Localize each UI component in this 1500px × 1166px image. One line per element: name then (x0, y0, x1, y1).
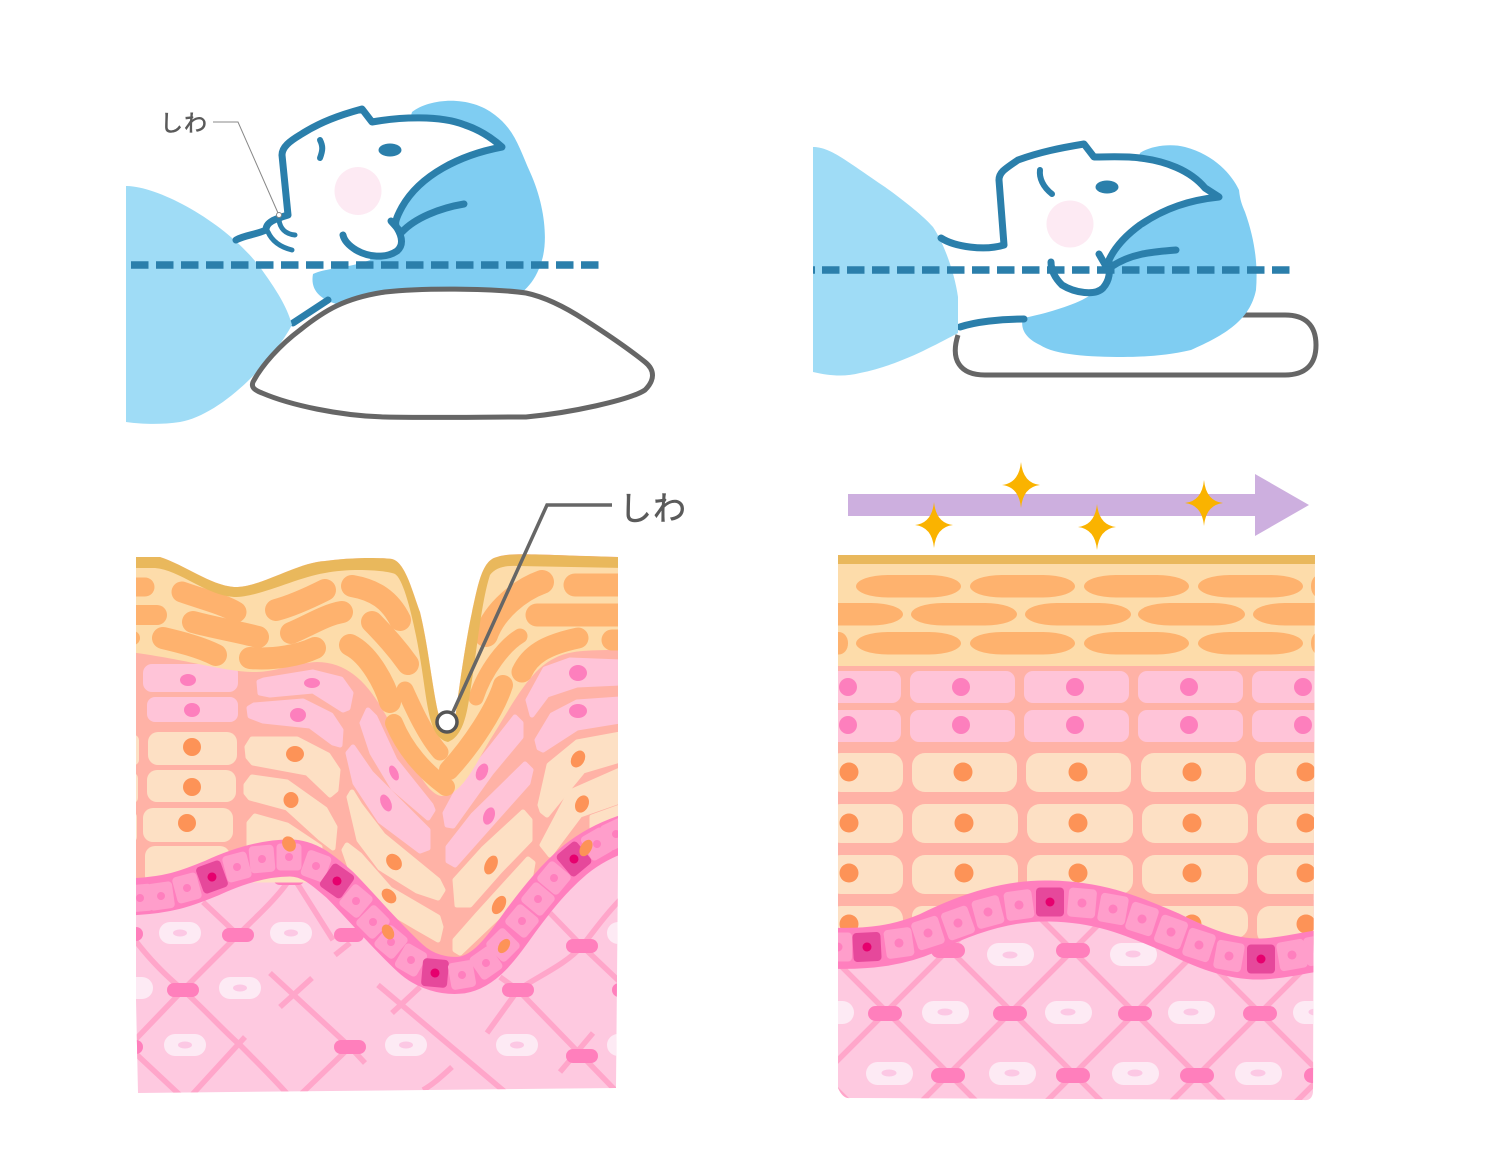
callout: wrinkle small: しわ (160, 110, 208, 136)
panel: wrinkled skin cross section (136, 554, 618, 1093)
basal layer band (825, 901, 1325, 959)
sparkles (915, 462, 1223, 550)
dermis base (830, 900, 1320, 1105)
stratum corneum base (130, 557, 625, 796)
shoulder (126, 186, 292, 424)
cheek (1046, 200, 1094, 248)
eye (378, 144, 402, 156)
callout: wrinkle large: しわ (619, 490, 687, 527)
pillow (252, 289, 652, 417)
cell nuclei (839, 678, 1316, 934)
stratum corneum orange cells (130, 582, 625, 787)
stratum corneum cells (838, 575, 1315, 654)
epidermis background (830, 660, 1320, 959)
cheek (334, 167, 382, 215)
epidermis background (136, 554, 618, 957)
low pillow (955, 315, 1316, 375)
epidermis pink cells (143, 660, 620, 865)
head outline (236, 109, 502, 256)
neck and back outline (293, 300, 328, 323)
figure: correct pillow sleeper (813, 144, 1316, 376)
callout: wrinkle small (160, 110, 282, 218)
cream cell rows (828, 753, 1327, 945)
hair (1022, 145, 1257, 357)
cell nuclei (178, 665, 592, 917)
basal cells (126, 816, 633, 990)
head outline (941, 144, 1219, 293)
pale oval cells (136, 922, 618, 1056)
gold surface layer (830, 555, 1320, 564)
pillow hair (312, 101, 545, 305)
hairline detail (391, 204, 464, 232)
collagen lattice (838, 922, 1314, 1100)
face fill (282, 109, 502, 256)
epidermis cream cells (128, 732, 620, 953)
eyebrow (1040, 170, 1052, 194)
back line (960, 319, 1024, 327)
figure: high pillow sleeper (126, 101, 652, 424)
fibroblast cells (868, 943, 1338, 1083)
dashed alignment line (131, 261, 600, 269)
collagen fibres (135, 883, 620, 1097)
stratum corneum base (830, 560, 1320, 666)
arrow: improvement (848, 474, 1309, 536)
callout: wrinkle large (437, 490, 687, 732)
face fill (999, 144, 1219, 293)
gold surface layer (130, 554, 625, 742)
neck wrinkles (268, 220, 295, 250)
dermis base (130, 540, 625, 1100)
eye (1096, 180, 1118, 194)
dashed alignment line (813, 266, 1290, 274)
eyebrow (320, 140, 322, 158)
basal cells (824, 887, 1335, 974)
displaced nuclei (279, 834, 595, 955)
pale oval cells (838, 943, 1314, 1085)
panel: healthy skin cross section (838, 555, 1315, 1100)
fibroblast cells (136, 882, 617, 1063)
shoulder (813, 147, 958, 376)
pink cell rows (828, 671, 1322, 742)
basal layer band (125, 833, 625, 975)
hairline detail (1099, 250, 1176, 268)
